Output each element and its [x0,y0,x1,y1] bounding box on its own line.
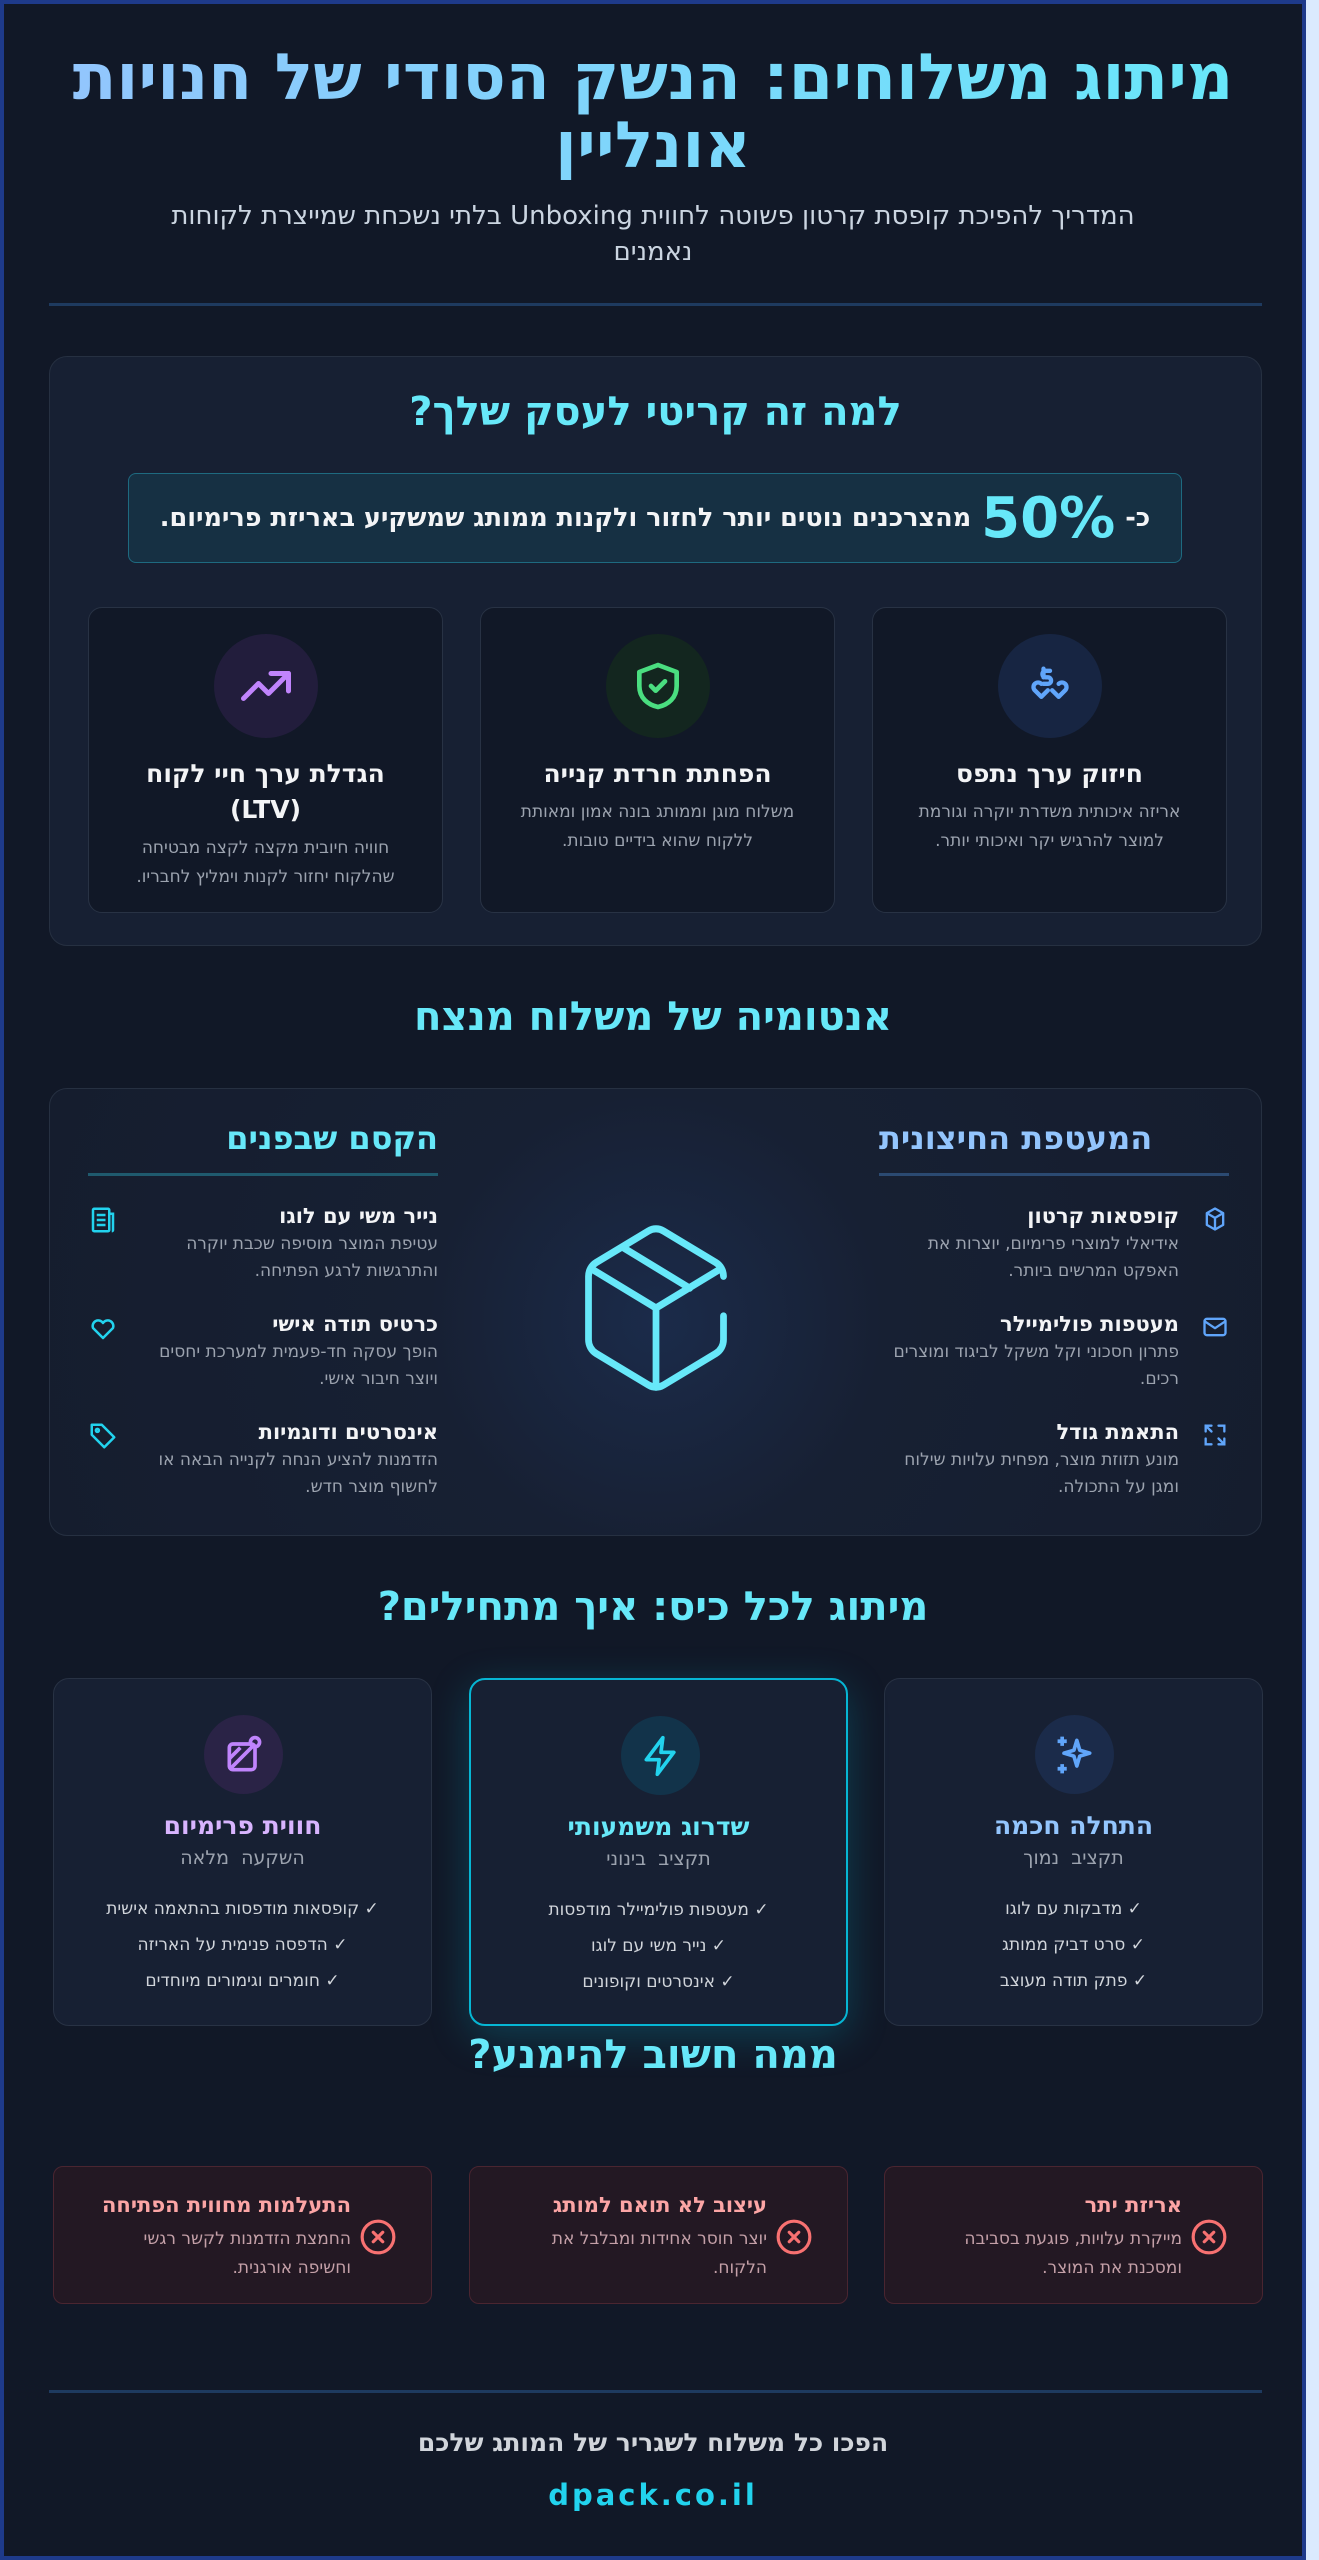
card: perceived value: חיזוק ערך נתפס [956,759,1143,788]
tier: smart start: ✓ פתק תודה מעוצב [1000,1971,1147,1991]
warning: over packaging [884,2166,1263,2304]
card: purchase anxiety: משלוח מוגן וממותג בונה אמון ומאותת ללקוח שהוא בידיים טובות. [521,802,794,851]
tier: premium: ✓ קופסאות מודפסות בהתאמה אישית [106,1899,379,1919]
item: carton [928,1204,1224,1281]
stat callout: 50% [981,486,1115,550]
icon: lightning [621,1716,700,1795]
tier: premium [53,1678,432,2026]
footer tagline: הפכו כל משלוח לשגריר של המותג שלכם [418,2428,888,2457]
stat callout [128,473,1182,563]
tier: smart start: תקציב נמוך [1023,1847,1124,1869]
item: inserts: אינסרטים ודוגמיות [259,1420,438,1444]
column: inner magic [88,1119,438,1497]
tier: meaningful upgrade [469,1678,848,2026]
heading: inner: הקסם שבפנים [226,1119,438,1157]
tier: premium: השקעה מלאה [180,1847,305,1869]
item: inserts: הזדמנות להציע הנחה לקנייה הבאה או לחשוף מוצר חדש. [158,1450,438,1497]
warning: mismatched design: יוצר חוסר אחידות ומבלבל את הלקוח. [552,2229,767,2278]
icon: x circle [1192,2220,1226,2254]
item: thank you card [91,1312,438,1389]
title: מיתוג משלוחים: הנשק הסודי של חנויות אונליין [73,41,1233,183]
item: tissue paper: נייר משי עם לוגו [279,1204,438,1228]
tier: smart start: ✓ סרט דביק ממותג [1002,1935,1145,1955]
icon: sparkle [1035,1715,1114,1794]
tier: smart start [884,1678,1263,2026]
icon: hands dollar [998,634,1102,738]
item: size [904,1420,1226,1497]
warning: ignoring unboxing: התעלמות מחווית הפתיחה [102,2193,351,2217]
panel: why critical [49,356,1262,946]
item: polymailer [894,1312,1227,1389]
heading: branding for every budget: מיתוג לכל כיס: איך מתחילים? [378,1584,928,1630]
card: LTV: חוויה חיובית מקצה לקצה מבטיחה שהלקוח יחזור לקנות וימליץ לחבריו. [136,838,395,887]
warning: ignoring unboxing: החמצת הזדמנות לקשר רגשי וחשיפה אורגנית. [144,2229,351,2278]
heading: why critical: למה זה קריטי לעסק שלך? [409,389,902,435]
heading: anatomy: אנטומיה של משלוח מנצח [414,994,892,1040]
footer url: dpack.co.il [548,2478,758,2512]
card: LTV [88,607,443,913]
warning: over packaging: אריזת יתר [1085,2193,1182,2217]
card: perceived value [872,607,1227,913]
stat callout: כ- [1125,503,1150,533]
tier: premium: ✓ חומרים וגימורים מיוחדים [145,1971,340,1991]
item: tissue paper: עטיפת המוצר מוסיפה שכבת יוקרה והתרגשות לרגע הפתיחה. [186,1234,438,1281]
item: tissue paper [92,1204,438,1281]
icon: palette [204,1715,283,1794]
item: size: מונע תזוזת מוצר, מפחית עלויות שילוח ומגן על התכולה. [904,1450,1179,1497]
card: purchase anxiety [480,607,835,913]
item: polymailer: פתרון חסכוני וקל משקל לביגוד ומוצרים רכים. [894,1342,1179,1389]
tier: meaningful upgrade: תקציב בינוני [606,1848,711,1870]
icon: x circle [360,2220,396,2254]
icon: x circle [776,2220,812,2254]
item: inserts [90,1420,438,1497]
tier: smart start: התחלה חכמה [994,1811,1153,1840]
icon: big box [585,1225,727,1391]
tier: premium: חווית פרימיום [164,1811,321,1840]
item: thank you card: הופך עסקה חד-פעמית למערכת יחסים ויוצר חיבור אישי. [159,1342,438,1389]
tier: meaningful upgrade: ✓ נייר משי עם לוגו [591,1936,726,1956]
tier: smart start: ✓ מדבקות עם לוגו [1005,1899,1142,1919]
tier: meaningful upgrade: שדרוג משמעותי [568,1812,749,1841]
column: outer wrap [879,1119,1229,1497]
item: polymailer: מעטפות פולימיילר [1000,1312,1179,1336]
heading: what to avoid: ממה חשוב להימנע? [468,2032,838,2078]
tier: meaningful upgrade: ✓ אינסרטים וקופונים [582,1972,735,1992]
card: perceived value: אריזה איכותית משדרת יוקרה וגורמת למוצר להרגיש יקר ואיכותי יותר. [919,802,1180,851]
item: size: התאמת גודל [1056,1420,1179,1444]
icon: trend up [214,634,318,738]
item: carton: קופסאות קרטון [1027,1204,1179,1228]
card: purchase anxiety: הפחתת חרדת קנייה [544,759,772,788]
item: carton: אידיאלי למוצרי פרימיום, יוצרות את האפקט המרשים ביותר. [928,1234,1179,1281]
card: LTV: הגדלת ערך חיי לקוח (LTV) [146,759,385,824]
icon: shield check [606,634,710,738]
warning: ignoring unboxing [53,2166,432,2304]
panel: anatomy [49,1088,1262,1536]
stat callout: מהצרכנים נוטים יותר לחזור ולקנות ממותג שמשקיע באריזת פרימיום. [160,503,971,533]
warning: mismatched design: עיצוב לא תואם למותג [553,2193,767,2217]
subtitle: המדריך להפיכת קופסת קרטון פשוטה לחווית Unboxing בלתי נשכחת שמייצרת לקוחות נאמנים [171,201,1135,267]
tier: meaningful upgrade: ✓ מעטפות פולימיילר מודפסות [548,1900,769,1920]
tier: premium: ✓ הדפסה פנימית על האריזה [138,1935,347,1955]
item: thank you card: כרטיס תודה אישי [272,1312,438,1336]
warning: over packaging: מייקרת עלויות, פוגעת בסביבה ומסכנת את המוצר. [964,2229,1182,2278]
warning: mismatched design [469,2166,848,2304]
heading: outer: המעטפת החיצונית [879,1119,1152,1157]
